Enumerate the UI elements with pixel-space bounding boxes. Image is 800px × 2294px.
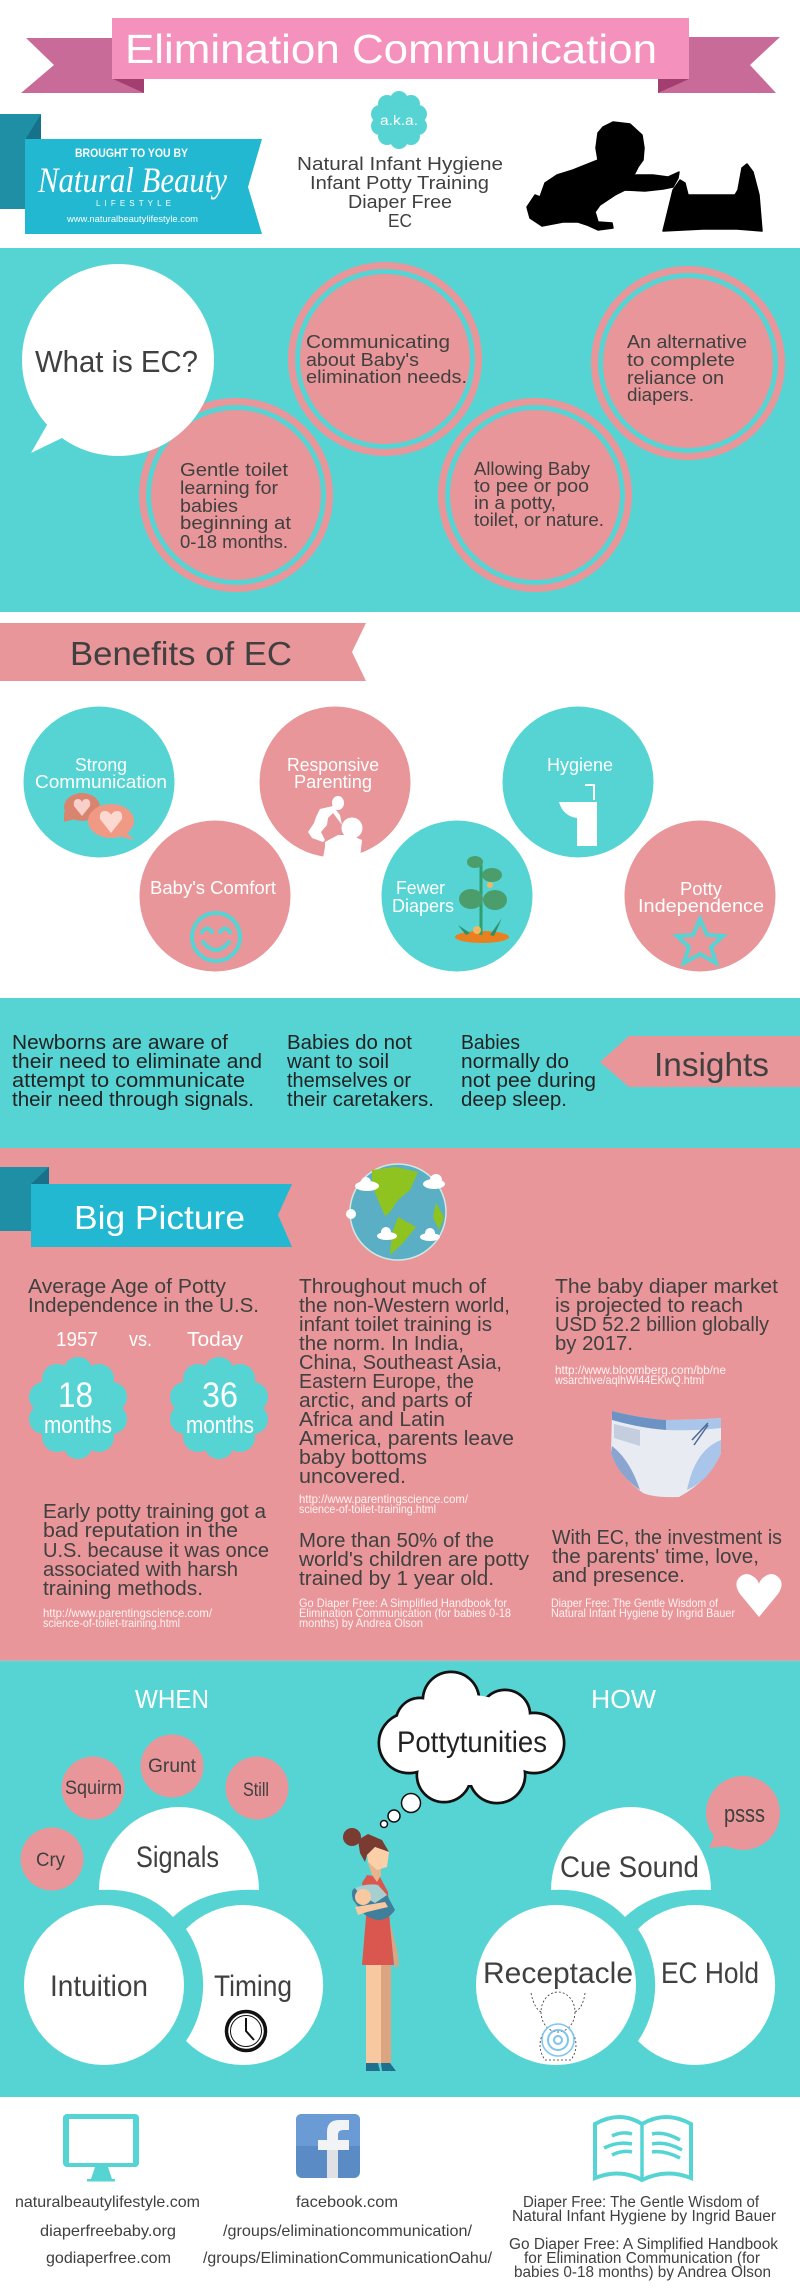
column: books: for Elimination Communication (for bbox=[524, 2250, 760, 2267]
text: non-western world: baby bottoms bbox=[299, 1447, 427, 1469]
signal: still: Still bbox=[243, 1780, 269, 1801]
heading: how: HOW bbox=[591, 1684, 656, 1714]
text: average age: Independence in the U.S. bbox=[28, 1295, 259, 1317]
circle: communicating: about Baby's bbox=[306, 350, 419, 370]
text: non-western world: Africa and Latin bbox=[299, 1409, 445, 1431]
text: non-western world: America, parents leave bbox=[299, 1428, 514, 1450]
shape: signals: Signals bbox=[136, 1841, 219, 1874]
source: parentingscience centre: science-of-toilet-training.html bbox=[299, 1502, 436, 1516]
panel: big picture bbox=[0, 1148, 800, 1661]
benefit: responsive parenting bbox=[260, 706, 410, 858]
circle: communicating: Communicating bbox=[306, 332, 450, 352]
text: non-western world: China, Southeast Asia, bbox=[299, 1352, 502, 1374]
panel: insights bbox=[0, 998, 800, 1148]
column: books: Go Diaper Free: A Simplified Handbook bbox=[509, 2236, 778, 2253]
badge: 18 months: months bbox=[44, 1412, 112, 1439]
insight: newborns: their need through signals. bbox=[12, 1089, 254, 1111]
banner: brought to you by: LIFESTYLE bbox=[96, 199, 171, 208]
shape: cue sound: Cue Sound bbox=[560, 1851, 699, 1884]
badge: 36 months bbox=[170, 1357, 268, 1459]
shape: signals bbox=[99, 1807, 259, 1917]
circle: gentle toilet learning: Gentle toilet bbox=[180, 460, 288, 480]
icon: dashed toilet bbox=[531, 1992, 585, 2060]
icon: smiley bbox=[192, 913, 240, 961]
circle: gentle toilet learning: babies bbox=[180, 496, 238, 516]
shape: intuition: Intuition bbox=[50, 1970, 148, 2003]
comparison labels: 1957 vs today: 1957 bbox=[56, 1329, 98, 1351]
also known as list: Natural Infant Hygiene bbox=[297, 154, 503, 174]
icon: sink bbox=[559, 785, 597, 846]
circle: alternative: diapers. bbox=[627, 385, 694, 405]
text: early potty training: Early potty training got a bbox=[43, 1501, 267, 1523]
also known as list: Infant Potty Training bbox=[310, 173, 489, 193]
bubble: psss bbox=[706, 1776, 780, 1850]
bubble: psss: psss bbox=[724, 1801, 765, 1828]
icon: baby and potty silhouette bbox=[527, 122, 762, 231]
circle: gentle toilet learning: learning for bbox=[180, 478, 278, 498]
badge: 36 months: months bbox=[186, 1412, 254, 1439]
insight: do not want to soil bbox=[286, 1032, 434, 1111]
text: average age: Average Age of Potty bbox=[28, 1276, 226, 1298]
panel: what is EC bbox=[0, 248, 800, 612]
benefit: potty independence: Independence bbox=[638, 896, 764, 916]
source: diaper free: Natural Infant Hygiene by Ingrid Bauer bbox=[551, 1606, 735, 1620]
source: bloomberg: wsarchive/aqlhWl44EKwQ.html bbox=[554, 1373, 704, 1387]
panel: when and how bbox=[0, 1660, 800, 2097]
benefit: fewer diapers: Diapers bbox=[392, 896, 454, 916]
text: non-western world: arctic, and parts of bbox=[299, 1390, 472, 1412]
title: Elimination Communication bbox=[125, 26, 657, 72]
banner: brought to you by: www.naturalbeautylifestyle.com bbox=[66, 214, 198, 225]
comparison labels: 1957 vs today bbox=[56, 1329, 243, 1351]
benefit: potty independence: Potty bbox=[680, 879, 722, 899]
banner: brought to you by: BROUGHT TO YOU BY bbox=[75, 148, 188, 160]
insight: deep sleep: Babies bbox=[461, 1032, 520, 1054]
circle: gentle toilet learning bbox=[139, 398, 333, 592]
column: websites bbox=[15, 2194, 200, 2267]
heading ribbon: benefits: Benefits of EC bbox=[70, 635, 292, 672]
shape: EC hold bbox=[638, 1905, 775, 2065]
heading ribbon: big picture bbox=[0, 1167, 292, 1247]
text: more than 50 percent: world's children are potty bbox=[298, 1549, 529, 1571]
thought cloud: pottytunities: Pottytunities bbox=[397, 1726, 547, 1759]
badge: 36 months: 36 bbox=[202, 1376, 238, 1415]
badge: a.k.a.: a.k.a. bbox=[380, 112, 418, 128]
icon: monitor bbox=[63, 2114, 139, 2182]
icon: open book bbox=[595, 2117, 691, 2180]
also known as list: Diaper Free bbox=[348, 192, 452, 212]
signal: still bbox=[226, 1756, 288, 1820]
speech bubble: what is EC: What is EC? bbox=[35, 344, 198, 379]
circle: allowing baby: Allowing Baby bbox=[474, 459, 590, 479]
circle: alternative: to complete bbox=[627, 350, 735, 370]
insight: deep sleep bbox=[461, 1032, 596, 1111]
illustration: mother holding baby bbox=[343, 1828, 399, 2071]
signal: grunt bbox=[140, 1734, 204, 1798]
benefit: potty independence bbox=[624, 820, 776, 972]
insight: do not want to soil: their caretakers. bbox=[287, 1089, 434, 1111]
column: facebook groups: /groups/eliminationcommunication/ bbox=[223, 2223, 473, 2240]
benefit: strong communication: Communication bbox=[35, 772, 167, 792]
text: early potty training: U.S. because it was once bbox=[43, 1540, 269, 1562]
insight: newborns bbox=[12, 1032, 262, 1111]
circle: allowing baby bbox=[438, 398, 632, 592]
shape: EC hold: EC Hold bbox=[661, 1957, 759, 1990]
heading ribbon: insights: Insights bbox=[654, 1046, 769, 1083]
heading: when: WHEN bbox=[135, 1684, 209, 1714]
text: non-western world: infant toilet training is bbox=[299, 1314, 492, 1336]
source: parentingscience left: http://www.parentingscience.com/ bbox=[43, 1606, 213, 1620]
column: books: Natural Infant Hygiene by Ingrid Bauer bbox=[512, 2208, 776, 2225]
text: non-western world: uncovered. bbox=[299, 1466, 406, 1488]
text: investment bbox=[552, 1527, 782, 1587]
column: facebook groups bbox=[203, 2194, 493, 2267]
circle: gentle toilet learning: beginning at bbox=[180, 513, 291, 533]
text: non-western world: the non-Western world, bbox=[299, 1295, 510, 1317]
source: go diaper free: months) by Andrea Olson bbox=[299, 1616, 423, 1630]
insight: deep sleep: normally do bbox=[461, 1051, 569, 1073]
heading ribbon: big picture: Big Picture bbox=[74, 1199, 245, 1236]
benefit: baby's comfort bbox=[140, 820, 290, 972]
icon: facebook bbox=[296, 2114, 360, 2178]
icon: money plant bbox=[455, 856, 509, 943]
also known as list: EC bbox=[388, 211, 412, 231]
text: diaper market: The baby diaper market bbox=[555, 1276, 778, 1298]
source: bloomberg bbox=[554, 1363, 726, 1387]
source: parentingscience centre bbox=[299, 1492, 469, 1516]
text: diaper market bbox=[555, 1276, 778, 1355]
shape: receptacle bbox=[476, 1905, 636, 2065]
text: diaper market: by 2017. bbox=[555, 1333, 633, 1355]
benefit: hygiene bbox=[502, 706, 654, 858]
badge: 18 months bbox=[29, 1357, 127, 1459]
circle: gentle toilet learning: 0-18 months. bbox=[180, 532, 288, 552]
heading ribbon: insights bbox=[600, 1036, 800, 1087]
insight: deep sleep: not pee during bbox=[461, 1070, 596, 1092]
shape: receptacle: Receptacle bbox=[483, 1957, 633, 1990]
comparison labels: 1957 vs today: Today bbox=[187, 1329, 243, 1351]
column: websites: diaperfreebaby.org bbox=[40, 2223, 176, 2240]
column: books: babies 0-18 months) by Andrea Olson bbox=[514, 2264, 771, 2281]
insight: do not want to soil: want to soil bbox=[286, 1051, 389, 1073]
text: early potty training: associated with harsh bbox=[43, 1559, 238, 1581]
text: more than 50 percent bbox=[298, 1530, 529, 1590]
title ribbon bbox=[21, 18, 780, 93]
source: parentingscience centre: http://www.parentingscience.com/ bbox=[299, 1492, 469, 1506]
icon: globe bbox=[346, 1164, 446, 1260]
benefit: responsive parenting: Responsive bbox=[287, 755, 379, 775]
benefit: responsive parenting: Parenting bbox=[294, 772, 372, 792]
badge: a.k.a. bbox=[371, 91, 427, 149]
circle: allowing baby: toilet, or nature. bbox=[474, 510, 604, 530]
source: parentingscience left bbox=[43, 1606, 213, 1630]
benefit: strong communication bbox=[24, 706, 174, 858]
benefit: strong communication: Strong bbox=[75, 755, 127, 775]
text: non-western world: the norm. In India, bbox=[299, 1333, 464, 1355]
circle: alternative: reliance on bbox=[627, 368, 724, 388]
column: facebook groups: /groups/EliminationCommunicationOahu/ bbox=[203, 2250, 493, 2267]
source: diaper free: Diaper Free: The Gentle Wisdom of bbox=[551, 1596, 719, 1610]
column: websites: godiaperfree.com bbox=[46, 2250, 171, 2267]
icon: diaper bbox=[611, 1411, 721, 1497]
column: facebook groups: facebook.com bbox=[296, 2194, 398, 2211]
text: average age bbox=[28, 1276, 259, 1317]
shape: intuition bbox=[24, 1905, 184, 2065]
signal: squirm: Squirm bbox=[65, 1778, 122, 1799]
circle: allowing baby: to pee or poo bbox=[474, 476, 589, 496]
column: books: Diaper Free: The Gentle Wisdom of bbox=[523, 2194, 760, 2211]
shape: timing: Timing bbox=[214, 1970, 292, 2003]
shape: cue sound bbox=[551, 1807, 711, 1917]
circle: communicating bbox=[288, 262, 482, 456]
icon: heart speech bubbles bbox=[64, 793, 134, 840]
heading ribbon: benefits bbox=[0, 623, 366, 681]
text: more than 50 percent: More than 50% of the bbox=[299, 1530, 494, 1552]
text: investment: With EC, the investment is bbox=[552, 1527, 782, 1549]
text: more than 50 percent: trained by 1 year old. bbox=[299, 1568, 494, 1590]
benefit: hygiene: Hygiene bbox=[547, 755, 613, 775]
speech bubble: what is EC bbox=[22, 264, 214, 456]
text: non-western world bbox=[299, 1276, 514, 1488]
source: go diaper free: Go Diaper Free: A Simplified Handbook for bbox=[299, 1596, 507, 1610]
signal: cry bbox=[20, 1828, 84, 1890]
icon: parent lifting baby bbox=[308, 796, 362, 858]
benefit: fewer diapers bbox=[382, 820, 532, 972]
insight: newborns: Newborns are aware of bbox=[12, 1032, 228, 1054]
circle: communicating: elimination needs. bbox=[306, 367, 467, 387]
benefit: baby's comfort: Baby's Comfort bbox=[150, 878, 276, 898]
signal: squirm bbox=[62, 1756, 124, 1820]
source: diaper free bbox=[551, 1596, 735, 1620]
insight: newborns: attempt to communicate bbox=[12, 1070, 245, 1092]
insight: do not want to soil: themselves or bbox=[287, 1070, 411, 1092]
signal: cry: Cry bbox=[36, 1850, 65, 1871]
text: investment: the parents' time, love, bbox=[552, 1546, 759, 1568]
icon: star bbox=[677, 919, 723, 963]
circle: alternative bbox=[591, 266, 785, 460]
shape: timing bbox=[186, 1905, 323, 2065]
banner: brought to you by bbox=[0, 114, 262, 234]
insight: deep sleep: deep sleep. bbox=[461, 1089, 567, 1111]
text: non-western world: Throughout much of bbox=[299, 1276, 486, 1298]
column: websites: naturalbeautylifestyle.com bbox=[15, 2194, 200, 2211]
source: go diaper free: Elimination Communication (for babies 0-18 bbox=[299, 1606, 511, 1620]
comparison labels: 1957 vs today: vs. bbox=[129, 1329, 152, 1351]
column: books bbox=[509, 2194, 778, 2281]
text: non-western world: Eastern Europe, the bbox=[299, 1371, 474, 1393]
circle: alternative: An alternative bbox=[627, 332, 747, 352]
also known as list bbox=[297, 154, 503, 231]
text: early potty training: training methods. bbox=[43, 1578, 203, 1600]
source: go diaper free bbox=[299, 1596, 511, 1630]
source: parentingscience left: science-of-toilet-training.html bbox=[43, 1616, 180, 1630]
benefit: fewer diapers: Fewer bbox=[396, 878, 445, 898]
banner: brought to you by: Natural Beauty bbox=[37, 160, 227, 200]
insight: newborns: their need to eliminate and bbox=[12, 1051, 262, 1073]
text: diaper market: USD 52.2 billion globally bbox=[555, 1314, 769, 1336]
icon: heart bbox=[736, 1574, 782, 1617]
text: diaper market: is projected to reach bbox=[555, 1295, 743, 1317]
icon: clock bbox=[226, 2012, 266, 2050]
text: early potty training bbox=[43, 1501, 269, 1600]
circle: allowing baby: in a potty, bbox=[474, 493, 556, 513]
text: early potty training: bad reputation in the bbox=[43, 1520, 238, 1542]
text: investment: and presence. bbox=[552, 1565, 685, 1587]
badge: 18 months: 18 bbox=[58, 1376, 93, 1415]
signal: grunt: Grunt bbox=[148, 1756, 197, 1777]
source: bloomberg: http://www.bloomberg.com/bb/ne bbox=[555, 1363, 726, 1377]
thought cloud: pottytunities bbox=[379, 1672, 564, 1828]
insight: do not want to soil: Babies do not bbox=[287, 1032, 412, 1054]
